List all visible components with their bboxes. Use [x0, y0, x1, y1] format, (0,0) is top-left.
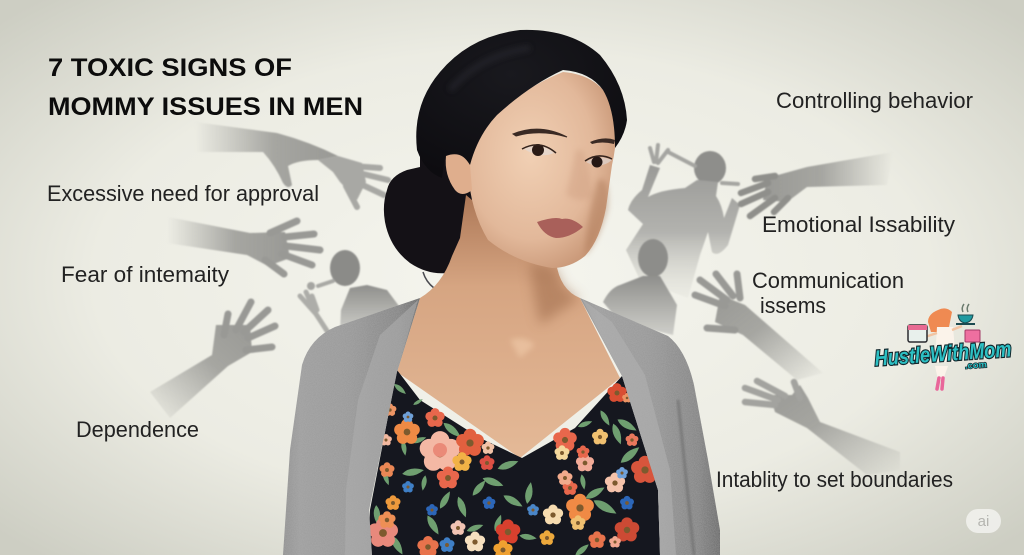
label: communication issues: Communication	[752, 268, 904, 293]
label: inability to set boundaries: Intablity to set boundaries	[716, 467, 953, 492]
title: 7 TOXIC SIGNS OF	[48, 54, 292, 82]
hair highlight	[450, 48, 530, 90]
label: communication issues: issems	[760, 293, 826, 318]
right eye	[585, 156, 612, 168]
lips	[537, 218, 583, 238]
cardigan left placket	[345, 300, 418, 555]
grey cardigan	[283, 298, 720, 555]
dress flowers	[368, 383, 659, 555]
right eyebrow	[590, 138, 615, 144]
right sleeve crease	[678, 400, 694, 555]
logo: HustleWithMom.com	[874, 304, 1012, 389]
logo .com: .com	[965, 359, 987, 371]
collarbone highlight	[510, 338, 535, 358]
face	[468, 72, 616, 268]
label: controlling behavior: Controlling behavior	[776, 88, 973, 113]
ear	[446, 154, 472, 194]
title	[48, 54, 363, 121]
neck shadow	[530, 262, 580, 325]
cheek shadow	[585, 179, 608, 256]
left eye	[522, 144, 556, 156]
neck and chest	[397, 195, 620, 458]
shadow figure: left man	[300, 250, 399, 337]
logo shopping bag	[965, 330, 980, 342]
shadow hand: lower right	[745, 381, 900, 475]
top hair	[416, 30, 627, 178]
shadow hand: top left	[195, 122, 388, 207]
ai badge	[966, 509, 1001, 533]
label: fear of intimacy: Fear of intemaity	[61, 262, 229, 287]
shadow hand: middle left	[167, 217, 320, 274]
cardigan right panel	[580, 298, 720, 555]
ai badge: ai	[978, 513, 989, 530]
label: dependence: Dependence	[76, 417, 199, 442]
title: MOMMY ISSUES IN MEN	[48, 93, 363, 121]
shadow hand: top right	[741, 152, 893, 216]
logo calendar	[908, 325, 927, 342]
logo figure	[925, 308, 962, 389]
woman portrait	[384, 30, 627, 458]
label: emotional instability: Emotional Issability	[762, 212, 955, 237]
bun of hair	[384, 140, 475, 273]
dress leaves	[373, 382, 642, 555]
shadow hand: right middle	[695, 274, 823, 380]
left eyebrow	[513, 129, 567, 137]
label: communication issues	[752, 268, 904, 318]
shadow figure: lower right man	[603, 239, 677, 335]
cardigan left panel	[283, 298, 420, 555]
dress base	[368, 370, 660, 555]
shadow hand: lower left	[150, 302, 275, 418]
shadow figure: upper right man	[626, 145, 740, 298]
label: excessive need for approval: Excessive need for approval	[47, 181, 319, 206]
cardigan right placket	[582, 299, 676, 555]
nose shadow	[566, 150, 592, 200]
floral dress	[368, 370, 660, 555]
logo coffee cup	[956, 304, 975, 324]
stray hair strand	[423, 272, 434, 288]
